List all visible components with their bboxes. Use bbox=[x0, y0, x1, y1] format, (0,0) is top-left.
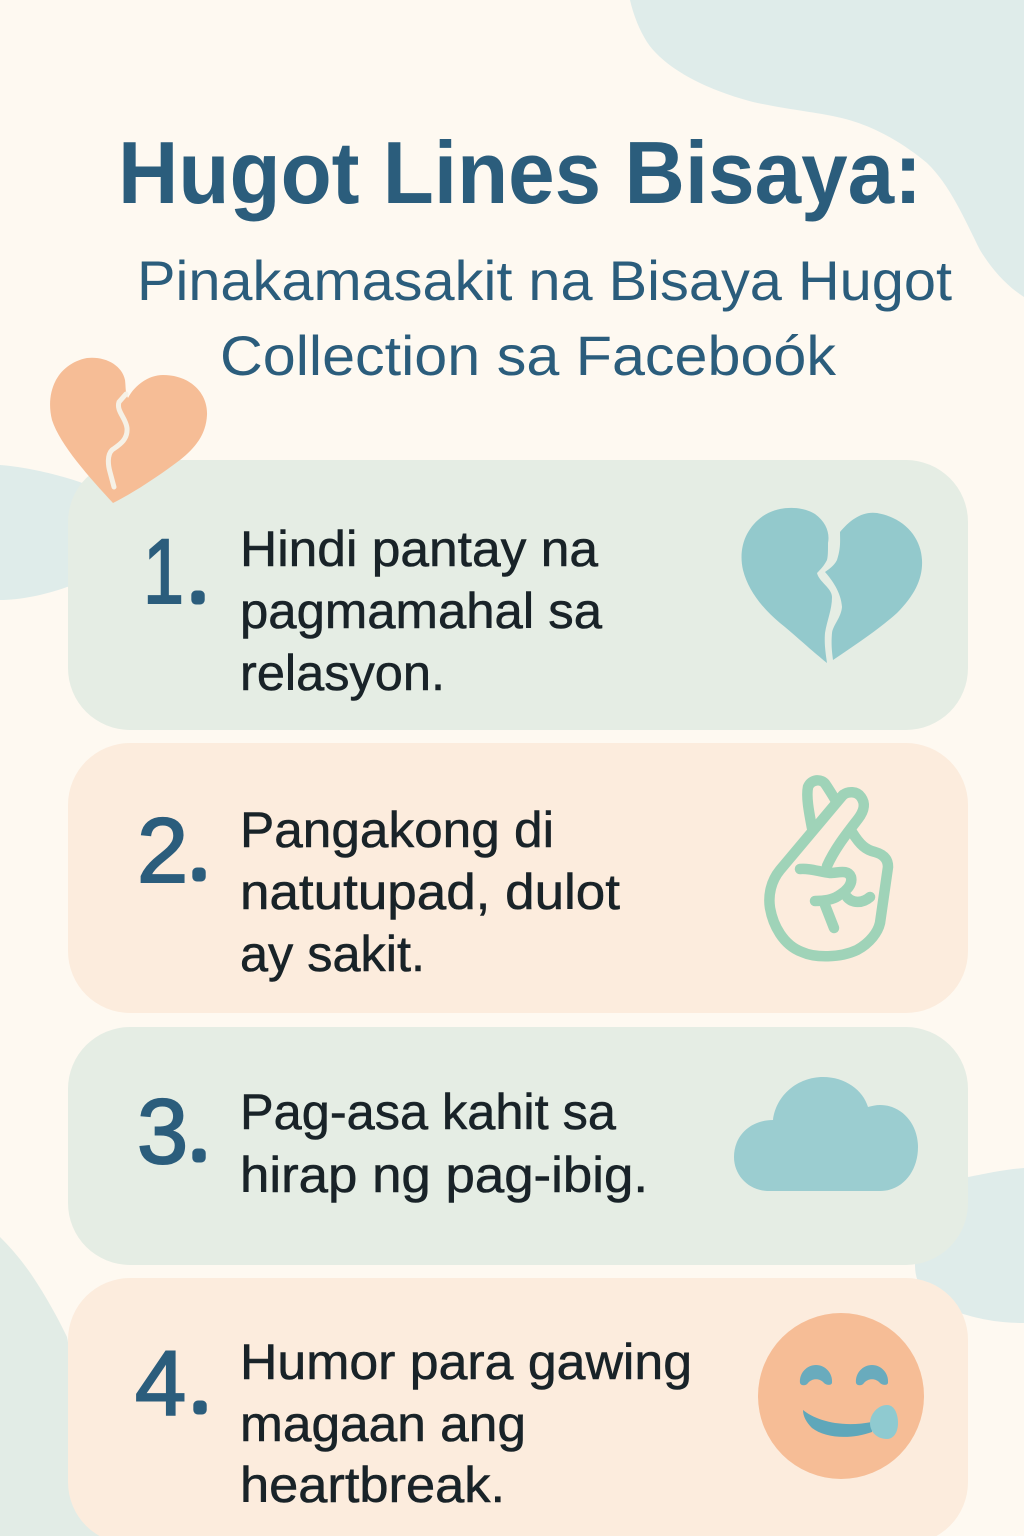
number 4: . bbox=[194, 1368, 206, 1420]
text 4 bbox=[240, 1334, 692, 1513]
subtitle: Collection sa Faceboók bbox=[220, 324, 837, 387]
panel 4: humor bbox=[68, 1278, 968, 1536]
number 4: 4 bbox=[135, 1333, 186, 1435]
icon: crossed fingers bbox=[769, 780, 888, 956]
background blob: top right bbox=[630, 0, 1024, 297]
text 4: magaan ang bbox=[240, 1396, 526, 1452]
number 3: 3 bbox=[137, 1081, 188, 1183]
number 1: . bbox=[192, 558, 204, 610]
text 2: Pangakong di bbox=[240, 802, 554, 858]
text 1: relasyon. bbox=[240, 645, 445, 701]
subtitle bbox=[137, 249, 952, 387]
number 3: . bbox=[193, 1116, 205, 1168]
panel 2: broken promises bbox=[68, 743, 968, 1013]
subtitle: Pinakamasakit na Bisaya Hugot bbox=[137, 249, 952, 312]
text 4: Humor para gawing bbox=[240, 1334, 692, 1390]
text 3 bbox=[240, 1084, 648, 1203]
background blob: bottom left bbox=[0, 1237, 110, 1536]
icon: smiling face with tear bbox=[758, 1313, 924, 1479]
background blob: right bbox=[915, 1168, 1024, 1323]
number 2: . bbox=[193, 835, 205, 887]
icon: teal broken heart bbox=[742, 508, 922, 663]
text 3: Pag-asa kahit sa bbox=[240, 1084, 616, 1140]
number 2: 2 bbox=[137, 800, 188, 902]
panel 3: hope bbox=[68, 1027, 968, 1265]
text 1: Hindi pantay na bbox=[240, 521, 598, 577]
icon: cloud bbox=[734, 1077, 918, 1191]
text 3: hirap ng pag-ibig. bbox=[240, 1147, 648, 1203]
text 1: pagmamahal sa bbox=[240, 583, 602, 639]
title: Hugot Lines Bisaya: bbox=[118, 123, 922, 222]
text 2: ay sakit. bbox=[240, 926, 425, 982]
number 1: 1 bbox=[143, 521, 184, 623]
icon: peach broken heart bbox=[50, 358, 207, 503]
panel 1: unequal love bbox=[68, 460, 968, 730]
background blob: left bbox=[0, 465, 112, 600]
text 2: natutupad, dulot bbox=[240, 864, 620, 920]
text 1 bbox=[240, 521, 602, 701]
text 2 bbox=[240, 802, 620, 982]
text 4: heartbreak. bbox=[240, 1457, 505, 1513]
